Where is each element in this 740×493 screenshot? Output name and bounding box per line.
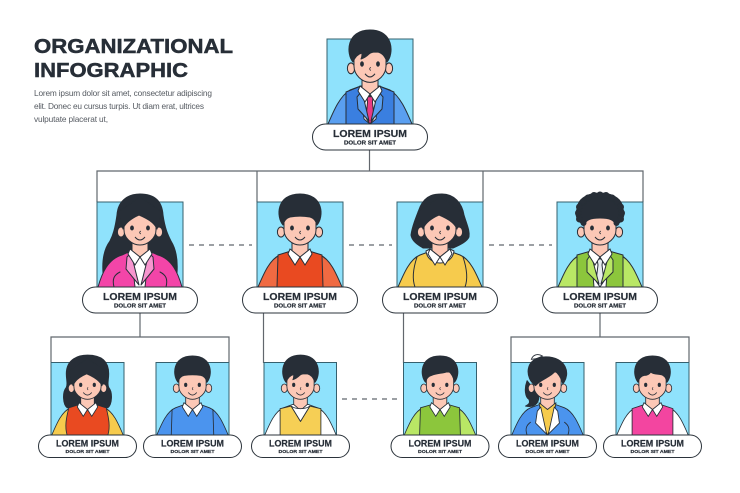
card: staff 1: [38, 355, 136, 458]
card: top executive: [312, 30, 428, 150]
name pill: [38, 435, 136, 458]
name pill: [242, 287, 358, 313]
description text: vulputate placerat ut,: [34, 114, 108, 124]
name pill: DOLOR SIT AMET: [418, 449, 462, 455]
name pill: LOREM IPSUM: [56, 438, 119, 448]
name pill: [382, 287, 498, 313]
description text: elit. Donec eu cursus turpis. Ut diam erat, ultrices: [34, 101, 204, 111]
name pill: DOLOR SIT AMET: [630, 449, 675, 455]
name pill: LOREM IPSUM: [103, 291, 177, 303]
card: manager 2: [242, 194, 358, 313]
name pill: LOREM IPSUM: [269, 438, 332, 448]
name pill: [252, 435, 350, 458]
name pill: LOREM IPSUM: [408, 438, 472, 448]
card: staff 3: [252, 355, 350, 458]
card: staff 6: [604, 356, 702, 458]
name pill: [604, 435, 702, 458]
name pill: [82, 287, 198, 313]
figure: man in pink vest: [617, 356, 688, 435]
title: INFOGRAPHIC: [34, 59, 188, 82]
figure: man in red vest: [258, 194, 342, 287]
name pill: LOREM IPSUM: [563, 291, 637, 303]
name pill: DOLOR SIT AMET: [278, 449, 323, 455]
figure: man in blue sweater: [157, 356, 228, 435]
name pill: DOLOR SIT AMET: [114, 304, 167, 310]
description text: [34, 88, 212, 124]
card: manager 1: [82, 194, 198, 313]
name pill: [542, 287, 658, 313]
figure: man in yellow vest: [265, 355, 336, 435]
name pill: DOLOR SIT AMET: [170, 449, 215, 455]
name pill: LOREM IPSUM: [333, 128, 407, 140]
name pill: LOREM IPSUM: [621, 438, 684, 448]
figure: woman in red vest and yellow sleeves: [52, 355, 123, 435]
name pill: LOREM IPSUM: [161, 438, 224, 448]
name pill: LOREM IPSUM: [263, 291, 337, 303]
card: staff 4: [391, 356, 489, 458]
figure: woman with ponytail in blue blazer: [512, 355, 583, 435]
figure: woman with long hair in pink blazer: [98, 194, 182, 287]
name pill: [144, 435, 242, 458]
title: ORGANIZATIONAL: [34, 35, 233, 58]
name pill: [391, 435, 489, 458]
card: staff 5: [498, 355, 596, 458]
description text: Lorem ipsum dolor sit amet, consectetur adipiscing: [34, 88, 212, 98]
name pill: DOLOR SIT AMET: [414, 304, 467, 310]
name pill: [498, 435, 596, 458]
figure: man with curly hair in green blazer: [558, 192, 642, 287]
connector lines: [51, 150, 689, 399]
curly hair: [576, 192, 624, 226]
figure: man in blue suit with pink tie: [328, 30, 412, 124]
name pill: LOREM IPSUM: [516, 438, 579, 448]
name pill: DOLOR SIT AMET: [344, 140, 397, 146]
card: manager 4: [542, 192, 658, 313]
name pill: DOLOR SIT AMET: [66, 449, 110, 455]
title: [34, 35, 233, 82]
name pill: [312, 124, 428, 150]
name pill: LOREM IPSUM: [403, 291, 477, 303]
figure: woman with bob hair in yellow sweater: [398, 194, 482, 287]
name pill: DOLOR SIT AMET: [574, 304, 627, 310]
name pill: DOLOR SIT AMET: [274, 304, 327, 310]
figure: man in green sweater: [404, 356, 476, 435]
card: staff 2: [144, 356, 242, 458]
card: manager 3: [382, 194, 498, 313]
name pill: DOLOR SIT AMET: [526, 449, 570, 455]
